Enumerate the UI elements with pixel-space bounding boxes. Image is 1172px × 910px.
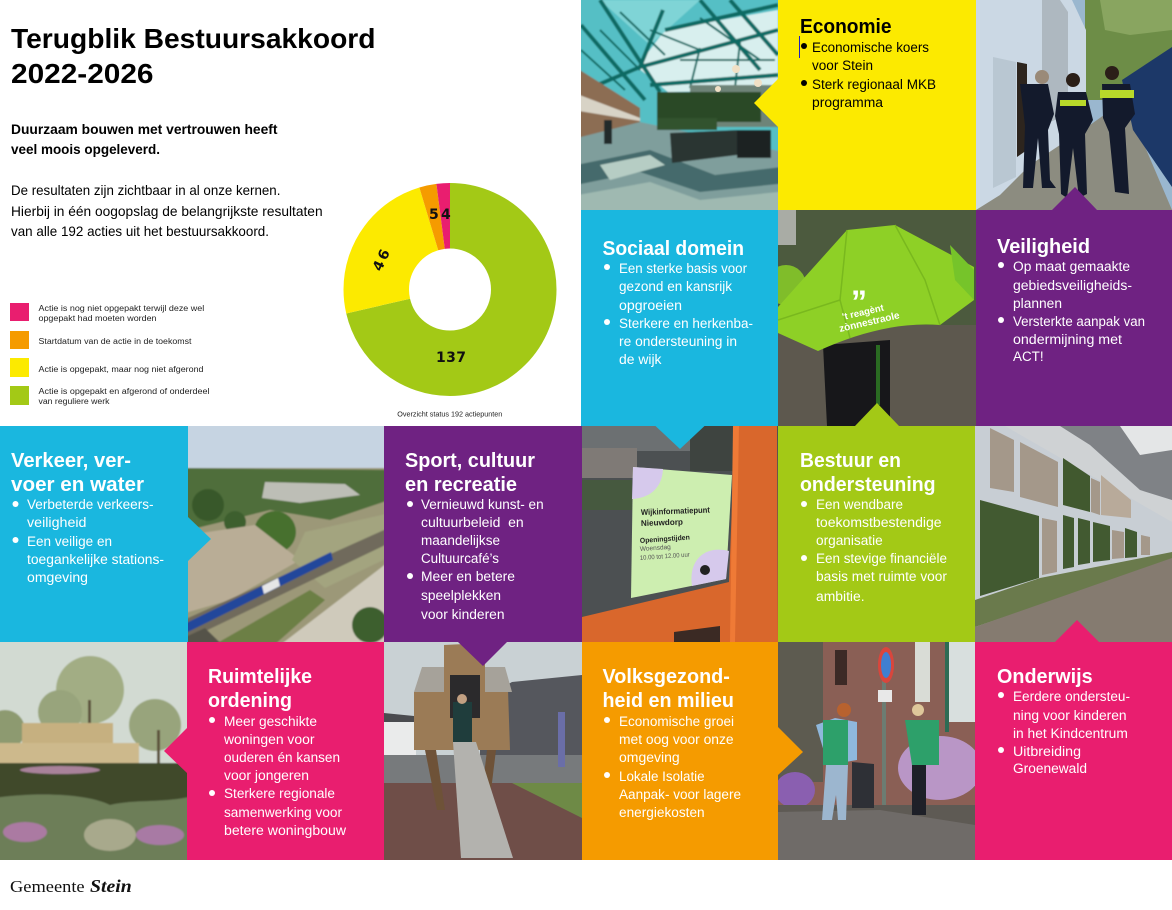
panel: ruimtelijke ordening [164, 642, 384, 860]
bullet list: verkeer: Verbeterde verkeers- [27, 497, 154, 512]
photo: volunteers cleaning the street [778, 642, 975, 860]
legend: van reguliere werk [38, 397, 111, 406]
arrow: points up [1052, 187, 1097, 210]
bullet list: bestuur [801, 497, 948, 604]
donut chart: 4 [441, 207, 451, 223]
photo: information point poster on orange door: 10.00 tot 12.00 uur [640, 551, 691, 562]
heading: ruimtelijke ordening: Ruimtelijke [208, 666, 312, 688]
bullet list: veiligheid: plannen [1013, 296, 1062, 311]
bullet list: bestuur: organisatie [816, 533, 883, 548]
bullet list: sport: speelplekken [421, 588, 501, 603]
bullet list: volksgezondheid: Aanpak- voor lagere [619, 787, 741, 802]
legend: Startdatum van de actie in de toekomst [38, 337, 192, 346]
footer logo: Gemeente Stein [10, 876, 132, 896]
bullet list: ruimtelijke ordening: ouderen én kansen [224, 750, 340, 765]
bullet list: verkeer: omgeving [27, 570, 88, 585]
bullet list: sport: Vernieuwd kunst- en [421, 497, 544, 512]
bullet list: bestuur: basis met ruimte voor [816, 569, 948, 584]
heading: onderwijs: Onderwijs [997, 666, 1093, 688]
bullet list: volksgezondheid [604, 714, 741, 820]
arrow: points down [656, 426, 704, 449]
bullet list: sociaal domein [604, 261, 753, 367]
panel: economie [754, 0, 976, 210]
bullet list: volksgezondheid: Economische groei [619, 714, 734, 729]
photo: building with green facade [975, 426, 1172, 642]
bullet list: onderwijs: Uitbreiding [1013, 744, 1081, 759]
heading: sport, cultuur en recreatie: Sport, cultuur [405, 450, 535, 472]
arrow: points up [1055, 620, 1099, 642]
bullet list: veiligheid: Op maat gemaakte [1013, 259, 1130, 274]
bullet list: volksgezondheid: energiekosten [619, 805, 705, 820]
title [11, 23, 376, 89]
bullet list: volksgezondheid: Lokale Isolatie [619, 769, 705, 784]
photo: information point poster on orange door: Woensdag [640, 544, 671, 553]
bullet list: verkeer [12, 497, 164, 585]
photo: wooden play house with slide [384, 642, 582, 860]
bullet list: ruimtelijke ordening: voor jongeren [224, 768, 309, 783]
photo: information point poster on orange door: Nieuwdorp [641, 518, 683, 528]
bullet list: sociaal domein: Een sterke basis voor [619, 261, 747, 276]
donut chart: 5 [429, 207, 439, 223]
photo: person under green umbrella: zònnestraole [838, 310, 901, 335]
heading: bestuur en ondersteuning: ondersteuning [800, 474, 936, 496]
bullet list: sociaal domein: gezond en kansrijk [619, 279, 732, 294]
heading: bestuur en ondersteuning: Bestuur en [800, 450, 901, 472]
bullet list: veiligheid: ACT! [1013, 349, 1044, 364]
photo: information point poster on orange door [582, 426, 778, 642]
heading: sociaal domein: Sociaal domein [602, 238, 744, 260]
arrow: points left [754, 79, 778, 127]
bullet list: onderwijs: ning voor kinderen [1013, 708, 1127, 723]
title: Terugblik Bestuursakkoord [11, 23, 376, 54]
heading: ruimtelijke ordening [208, 666, 312, 712]
intro text: body: van alle 192 acties uit het bestuursakkoord. [11, 223, 269, 239]
bullet list: onderwijs [998, 689, 1130, 776]
arrow: points left [164, 728, 187, 773]
heading: volksgezondheid en milieu [602, 666, 734, 712]
heading: veiligheid: Veiligheid [997, 236, 1090, 258]
heading: ruimtelijke ordening: ordening [208, 690, 292, 712]
heading: verkeer, vervoer en water: voer en water [11, 474, 144, 496]
legend: Actie is opgepakt, maar nog niet afgerond [38, 365, 204, 374]
panel: sport, cultuur en recreatie [384, 426, 582, 666]
bullet list: economie [801, 40, 936, 110]
intro text: body [11, 182, 323, 239]
bullet list: volksgezondheid: met oog voor onze [619, 732, 734, 747]
photo: covered shopping arcade [581, 0, 778, 210]
photo: information point poster on orange door: Wijkinformatiepunt [641, 506, 710, 517]
bullet list: ruimtelijke ordening: betere woningbouw [224, 823, 346, 838]
bullet list: verkeer: toegankelijke stations- [27, 552, 164, 567]
photo: person under green umbrella: ” [851, 284, 867, 320]
heading: volksgezondheid en milieu: heid en milieu [602, 690, 734, 712]
bullet list: ruimtelijke ordening: Meer geschikte [224, 714, 317, 729]
bullet list: ruimtelijke ordening: samenwerking voor [224, 805, 342, 820]
arrow: points down [458, 642, 507, 666]
bullet list: verkeer: Een veilige en [27, 534, 112, 549]
heading: bestuur en ondersteuning [800, 450, 936, 496]
bullet list: sport: maandelijkse [421, 533, 500, 548]
intro text: bold [11, 121, 278, 157]
bullet list: economie: voor Stein [812, 58, 873, 73]
panel: veiligheid [976, 187, 1172, 426]
bullet list: veiligheid: ondermijning met [1013, 332, 1122, 347]
bullet list: sport: Meer en betere [421, 569, 515, 584]
intro text: bold: veel moois opgeleverd. [11, 141, 160, 157]
heading: sport, cultuur en recreatie: en recreatie [405, 474, 517, 496]
heading: verkeer, vervoer en water: Verkeer, ver- [11, 450, 131, 472]
photo: police officers in an alley [976, 0, 1172, 210]
heading: economie: Economie [800, 16, 892, 38]
bullet list: sociaal domein: re ondersteuning in [619, 334, 737, 349]
footer logo: Gemeente Stein: Stein [90, 876, 132, 896]
legend: Actie is nog niet opgepakt terwijl deze wel [38, 304, 204, 313]
panel: sociaal domein [581, 210, 778, 449]
bullet list: verkeer: veiligheid [27, 515, 86, 530]
bullet list: sport: Cultuurcafé’s [421, 551, 499, 566]
photo: render of new housing with trees [0, 642, 187, 860]
heading: verkeer, vervoer en water [11, 450, 144, 496]
heading: sport, cultuur en recreatie [405, 450, 535, 496]
arrow: points right [188, 517, 211, 561]
legend: Actie is opgepakt en afgerond of onderdeel [38, 387, 210, 396]
bullet list: sociaal domein: de wijk [619, 352, 662, 367]
panel: volksgezondheid en milieu [582, 642, 803, 860]
bullet list: sport: voor kinderen [421, 607, 504, 622]
arrow: points right [778, 727, 803, 775]
panel: onderwijs [975, 620, 1172, 860]
photo: person under green umbrella [778, 210, 976, 426]
donut chart: 137 [436, 350, 466, 366]
photo: aerial view of station and train [188, 426, 384, 642]
panel: verkeer, vervoer en water [0, 426, 211, 642]
bullet list: sociaal domein: Sterkere en herkenba- [619, 316, 753, 331]
bullet list: onderwijs: Eerdere ondersteu- [1013, 689, 1130, 704]
bullet list: bestuur: ambitie. [816, 589, 865, 604]
bullet list: ruimtelijke ordening [209, 714, 346, 838]
bullet list: bestuur: Een stevige financiële [816, 551, 947, 566]
bullet list: ruimtelijke ordening: woningen voor [223, 732, 315, 747]
footer logo: Gemeente Stein: Gemeente [10, 877, 85, 896]
photo: person under green umbrella: 't reagènt [841, 302, 886, 323]
bullet list: economie: Sterk regionaal MKB [812, 77, 936, 92]
legend [10, 303, 210, 406]
intro text: body: Hierbij in één oogopslag de belangrijkste resultaten [11, 203, 323, 219]
title: 2022-2026 [11, 58, 154, 89]
bullet list: sport [407, 497, 544, 622]
bullet list: bestuur: toekomstbestendige [816, 515, 942, 530]
bullet list: sport: cultuurbeleid en [421, 515, 524, 530]
intro text: bold: Duurzaam bouwen met vertrouwen heeft [11, 121, 278, 137]
intro text: body: De resultaten zijn zichtbaar in al onze kernen. [11, 182, 280, 198]
heading: volksgezondheid en milieu: Volksgezond- [602, 666, 730, 688]
bullet list: veiligheid: Versterkte aanpak van [1013, 314, 1145, 329]
bullet list: onderwijs: Groenewald [1013, 761, 1087, 776]
bullet list: veiligheid: gebiedsveiligheids- [1013, 278, 1132, 293]
photo: information point poster on orange door: Openingstijden [640, 533, 690, 545]
donut chart [370, 207, 524, 366]
donut chart: 46 [370, 247, 394, 274]
legend: opgepakt had moeten worden [38, 314, 156, 323]
text cursor mark [799, 36, 800, 58]
bullet list: bestuur: Een wendbare [816, 497, 903, 512]
bullet list: economie: Economische koers [812, 40, 929, 55]
bullet list: sociaal domein: opgroeien [619, 298, 682, 313]
bullet list: volksgezondheid: omgeving [619, 750, 680, 765]
panel: bestuur en ondersteuning [778, 403, 975, 642]
bullet list: economie: programma [812, 95, 883, 110]
bullet list: ruimtelijke ordening: Sterkere regionale [224, 786, 335, 801]
bullet list: onderwijs: in het Kindcentrum [1013, 726, 1128, 741]
arrow: points up [855, 403, 899, 426]
chart caption: Overzicht status 192 actiepunten [397, 410, 502, 418]
bullet list: veiligheid [998, 259, 1145, 364]
